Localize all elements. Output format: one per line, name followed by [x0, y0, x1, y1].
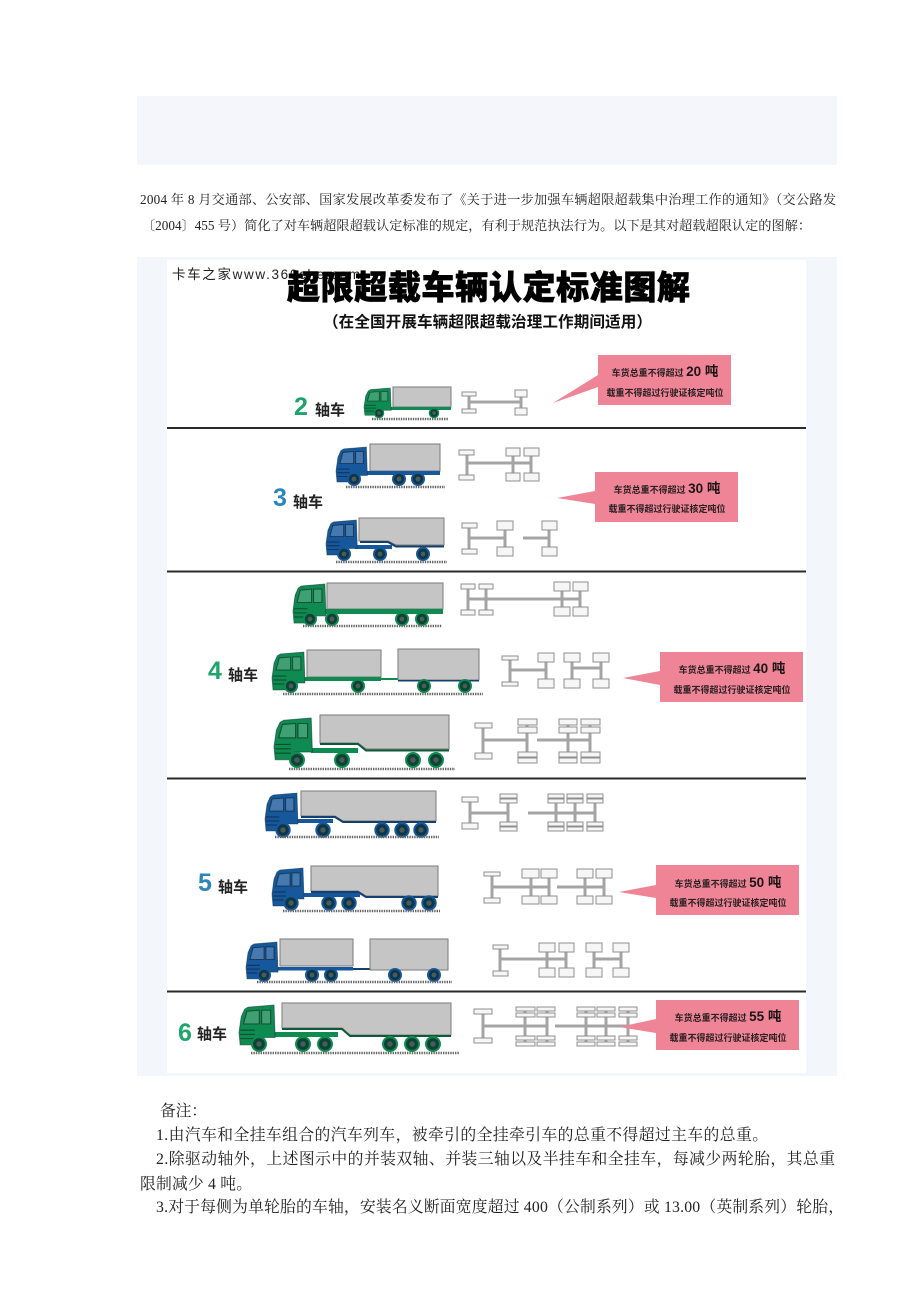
divider	[167, 778, 806, 780]
label: 3 axle: 3	[273, 484, 287, 512]
notes: 3.对于每侧为单轮胎的车轴，安装名义断面宽度超过 400（公制系列）或 13.00（英制系列）轮胎，	[156, 1197, 844, 1216]
callout: 50 ton	[619, 865, 799, 915]
label: 4 axle	[208, 657, 258, 685]
axle diagram: 3 axle rigid	[459, 448, 539, 481]
callout: 30 ton: 车货总重不得超过 30 吨	[614, 481, 721, 496]
axle diagram: 4 axle semi-trailer	[475, 719, 600, 763]
label: 5 axle: 5	[198, 869, 212, 897]
panel: infographic image	[137, 257, 837, 1076]
label: 6 axle: 6	[178, 1019, 192, 1047]
truck: 3 axle semi-trailer blue	[326, 518, 447, 562]
callout: 55 ton: 载重不得超过行驶证核定吨位	[669, 1032, 787, 1043]
callout: 40 ton	[623, 652, 803, 702]
label: 4 axle: 4	[208, 657, 222, 685]
callout: 20 ton: 载重不得超过行驶证核定吨位	[606, 387, 724, 398]
callout: 20 ton: 车货总重不得超过 20 吨	[612, 364, 719, 379]
axle diagram: 2 axle	[462, 390, 527, 415]
section: 2 axle	[294, 355, 731, 421]
axle diagram: 4 axle rigid	[461, 582, 588, 616]
callout: 30 ton: 载重不得超过行驶证核定吨位	[608, 503, 726, 514]
label: 2 axle: 轴车	[315, 401, 345, 419]
truck: 6 axle semi-trailer green	[239, 1003, 459, 1053]
subtitle: （在全国开展车辆超限超载治理工作期间适用）	[323, 312, 652, 331]
callout: 30 ton	[557, 472, 738, 522]
axle diagram: 3 axle semi-trailer	[462, 521, 557, 556]
section: 4 axle	[208, 582, 803, 769]
label: 6 axle	[178, 1019, 227, 1047]
notes: 限制减少 4 吨。	[140, 1175, 252, 1193]
axle diagram: 5 axle semi-trailer 1	[462, 794, 603, 831]
truck: 5 axle semi-trailer 1 blue	[265, 791, 439, 838]
axle diagram: 4 axle road train	[502, 653, 609, 688]
label: 3 axle: 轴车	[293, 493, 323, 511]
intro paragraph: 2004 年 8 月交通部、公安部、国家发展改革委发布了《关于进一步加强车辆超限超载集中治理工作的通知》（交公路发	[140, 191, 836, 207]
watermark: 卡车之家www.360che.com	[172, 266, 360, 282]
callout: 55 ton	[619, 1000, 799, 1050]
section: 5 axle	[198, 791, 799, 982]
truck: 5 axle semi-trailer 2 blue	[272, 866, 440, 911]
axle diagram: 5 axle road train	[493, 943, 629, 977]
truck: 2 axle green	[364, 387, 451, 419]
truck: 3 axle rigid blue	[336, 444, 445, 487]
top blank band	[137, 96, 837, 165]
label: 2 axle: 2	[294, 393, 308, 421]
label: 5 axle	[198, 869, 248, 897]
divider	[167, 990, 806, 992]
truck: 5 axle road train blue	[246, 939, 452, 982]
notes: 1.由汽车和全挂车组合的汽车列车，被牵引的全挂牵引车的总重不得超过主车的总重。	[156, 1125, 768, 1144]
label: 3 axle	[273, 484, 323, 512]
axle diagram: 6 axle	[474, 1007, 637, 1046]
callout: 55 ton: 车货总重不得超过 55 吨	[675, 1009, 782, 1024]
axle diagram: 5 axle semi-trailer 2	[484, 869, 612, 904]
intro paragraph: 〔2004〕455 号）简化了对车辆超限超载认定标准的规定，有利于规范执法行为。以下是其对超载超限认定的图解：	[142, 217, 811, 234]
truck: 4 axle semi-trailer green	[274, 715, 455, 769]
callout: 50 ton: 载重不得超过行驶证核定吨位	[669, 897, 787, 908]
section: 6 axle	[178, 1000, 799, 1053]
label: 4 axle: 轴车	[228, 666, 258, 684]
label: 5 axle: 轴车	[218, 878, 248, 896]
divider	[167, 570, 806, 572]
callout: 40 ton: 车货总重不得超过 40 吨	[679, 661, 786, 676]
title: 超限超载车辆认定标准图解	[287, 269, 690, 306]
label: 2 axle	[294, 393, 345, 421]
callout: 40 ton: 载重不得超过行驶证核定吨位	[673, 684, 791, 695]
callout: 20 ton	[553, 355, 731, 405]
label: 6 axle: 轴车	[197, 1025, 227, 1043]
intro paragraph	[140, 191, 836, 234]
section: 3 axle	[273, 444, 738, 562]
notes	[140, 1102, 844, 1216]
divider	[167, 427, 806, 429]
notes: 2.除驱动轴外，上述图示中的并装双轴、并装三轴以及半挂车和全挂车，每减少两轮胎，其总重	[156, 1150, 835, 1168]
truck: 4 axle rigid green	[293, 583, 443, 626]
callout: 50 ton: 车货总重不得超过 50 吨	[675, 875, 782, 890]
truck: 4 axle road train green	[272, 649, 483, 694]
notes: 备注：	[160, 1102, 207, 1120]
